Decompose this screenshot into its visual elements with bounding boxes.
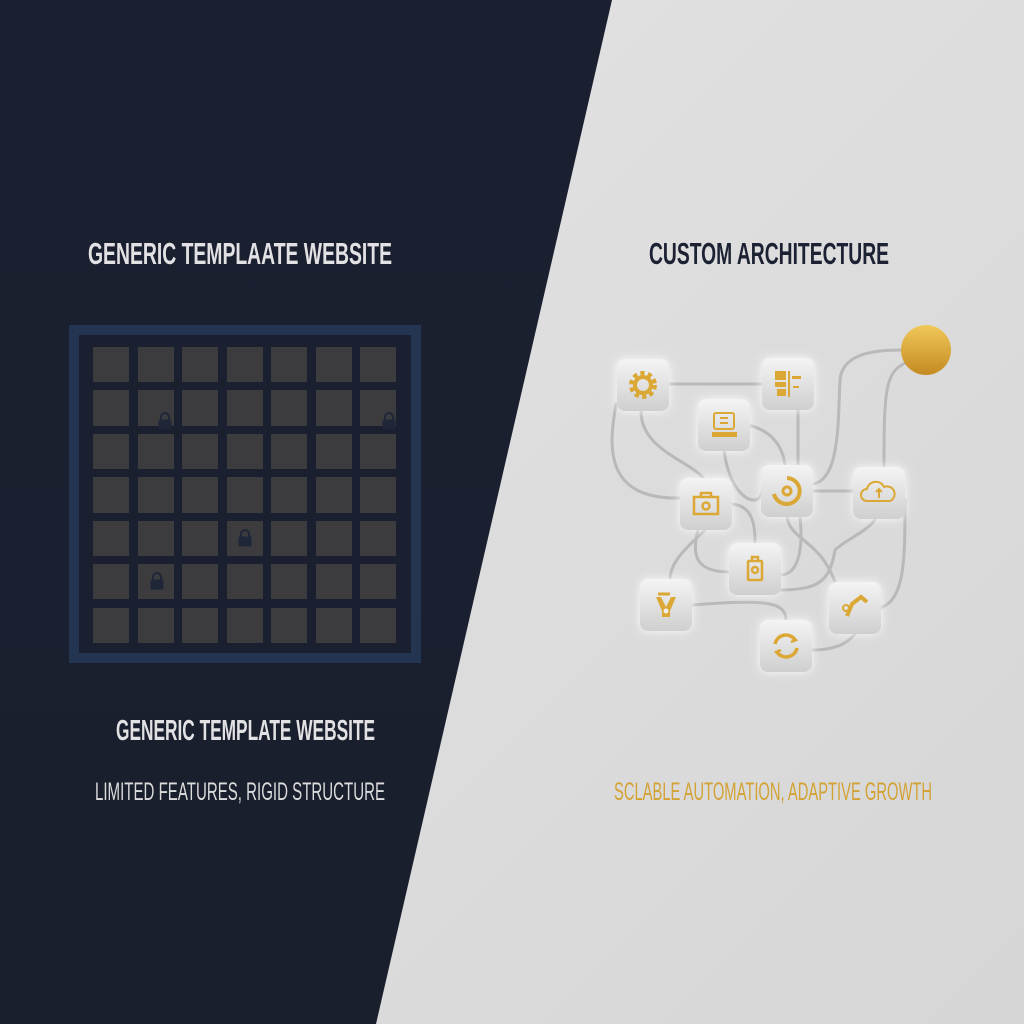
icon: funnel [656,594,676,617]
icon: cloud [861,482,895,501]
icon: padlocks [151,413,395,589]
icon: layout [775,371,801,397]
right title: CUSTOM ARCHITECTURE [649,236,889,271]
left subtitle: GENERIC TEMPLATE WEBSITE [116,715,375,747]
tiles [617,358,905,672]
gold node [901,325,951,375]
left title: GENERIC TEMPLAATE WEBSITE [88,236,392,271]
left caption: LIMITED FEATURES, RIGID STRUCTURE [95,778,385,806]
grid panel: rigid template [74,330,416,658]
icon: gear [632,374,654,396]
icon: toolbox [694,493,718,514]
icons [632,371,895,657]
background: left dark panel [0,0,612,1024]
connector lines [612,350,908,650]
icon: monitor [713,413,736,436]
icon: tag [748,557,762,580]
icon: robot arm [843,597,867,616]
network diagram: custom architecture [612,325,951,672]
icon: refresh [775,635,797,657]
icon: ring [774,478,800,504]
